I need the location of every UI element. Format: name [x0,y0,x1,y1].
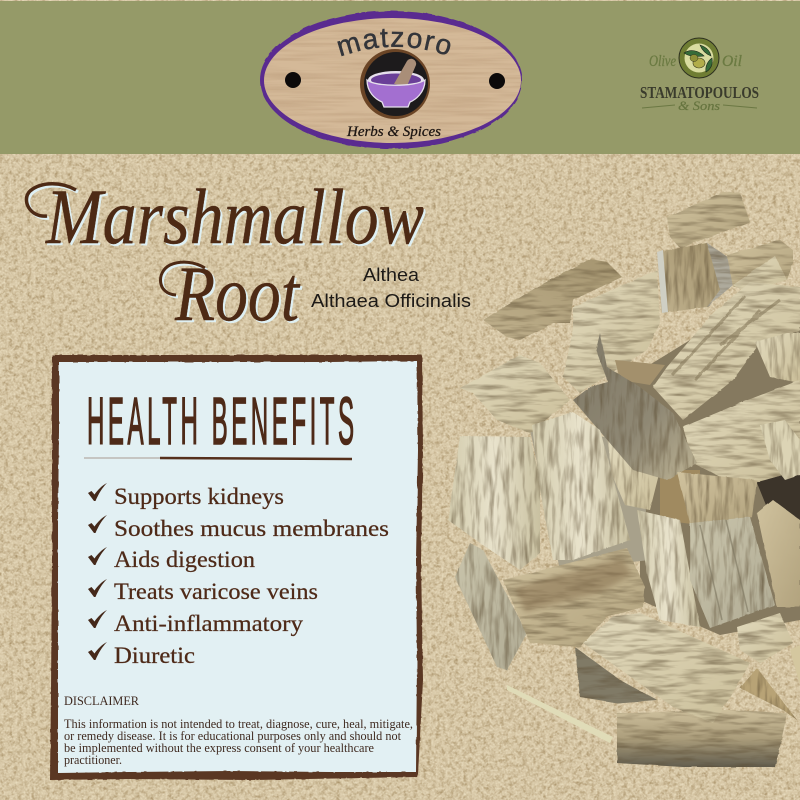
panel heading: HEALTH BENEFITS [87,383,354,459]
icon: mortar and pestle [360,49,430,119]
benefits checklist: Diuretic [114,643,195,668]
benefits checklist: Anti-inflammatory [114,611,304,636]
benefits checklist: Supports kidneys [114,484,284,509]
header band [0,1,800,154]
title: Marshmallow Root [26,173,424,337]
common and botanical names: Althea [363,264,420,285]
disclaimer: This information is not intended to treat, diagnose, cure, heal, mitigate, [64,717,413,731]
disclaimer: practitioner. [64,753,122,767]
matzoro logo plaque [260,10,522,149]
benefits checklist: Aids digestion [114,547,256,572]
benefits checklist: Soothes mucus membranes [114,516,389,541]
title: Marshmallow Root: Root [174,250,301,337]
common and botanical names: Althaea Officinalis [311,290,471,311]
panel: health benefits [50,355,423,780]
oil label: Oil [722,53,743,70]
Stamatopoulos olive oil logo [640,38,759,113]
benefits checklist: Treats varicose veins [114,579,318,604]
disclaimer: or remedy disease. It is for educational purposes only and should not [64,729,402,743]
company suffix: & Sons [678,98,720,113]
disclaimer [64,694,413,767]
company name: STAMATOPOULOS [640,83,759,102]
logo brand name: matzoro [337,28,450,56]
icon: olive branch badge [679,38,719,78]
disclaimer: DISCLAIMER [64,694,140,708]
logo tagline: Herbs & Spices [346,124,441,140]
common and botanical names [311,264,471,311]
title: Marshmallow Root: Marshmallow [45,173,424,260]
photo: pile of marshmallow root pieces [448,192,800,767]
disclaimer: be implemented without the express consent of your healthcare [64,741,374,755]
benefits checklist [88,483,389,668]
logo mounting holes [285,72,505,89]
olive label: Olive [649,53,676,70]
